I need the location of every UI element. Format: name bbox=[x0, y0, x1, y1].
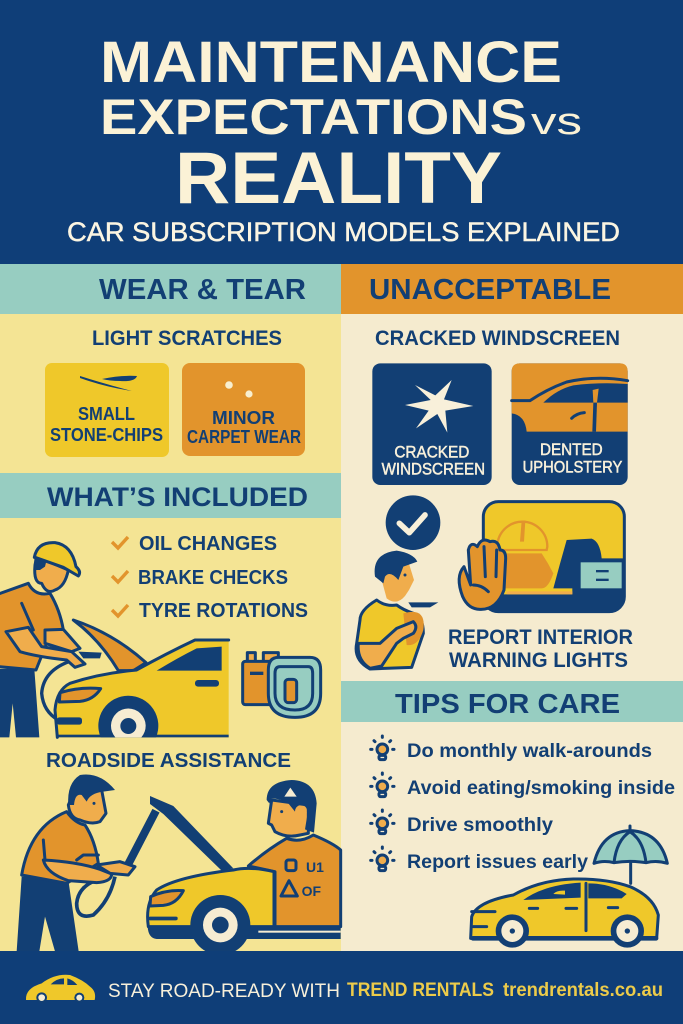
title: REALITY bbox=[175, 138, 502, 219]
heading: wear and tear bbox=[0, 264, 341, 314]
shirt badge: OF bbox=[302, 883, 322, 899]
hose tool bbox=[78, 652, 102, 658]
footer text: TREND RENTALS bbox=[347, 979, 494, 1001]
card: dented upholstery bbox=[512, 363, 628, 485]
shirt badge bbox=[281, 859, 324, 899]
heading: unacceptable: UNACCEPTABLE bbox=[369, 274, 611, 306]
icon: crack star bbox=[405, 380, 473, 433]
card: small stone-chips: STONE-CHIPS bbox=[50, 425, 163, 445]
illustration: car under umbrella bbox=[471, 826, 667, 948]
subheading: roadside assistance: ROADSIDE ASSISTANCE bbox=[46, 749, 291, 772]
left man pants bbox=[17, 877, 79, 951]
footer text: trendrentals.co.au bbox=[503, 979, 663, 1001]
list: care tips: Do monthly walk-arounds bbox=[407, 740, 652, 762]
card: minor carpet wear: CARPET WEAR bbox=[187, 427, 301, 447]
car hood bbox=[73, 620, 146, 671]
umbrella bbox=[594, 826, 667, 883]
caption: report interior warning lights: WARNING LIGHTS bbox=[449, 649, 628, 672]
card: small stone-chips: SMALL bbox=[78, 404, 135, 424]
title: MAINTENANCE bbox=[100, 30, 562, 95]
heading: unacceptable bbox=[341, 264, 683, 314]
panel: header bbox=[0, 0, 683, 264]
left man arm bbox=[43, 860, 135, 883]
wheel bbox=[611, 914, 644, 948]
list: care tips: Avoid eating/smoking inside bbox=[407, 777, 675, 799]
icon: stop hand bbox=[459, 540, 506, 609]
subheading: cracked windscreen: CRACKED WINDSCREEN bbox=[375, 327, 620, 350]
icon: bulb bbox=[371, 773, 394, 797]
card: minor carpet wear bbox=[182, 363, 305, 456]
panel: right column background bbox=[341, 314, 683, 951]
left man head bbox=[68, 790, 106, 823]
icon: check badge bbox=[386, 495, 440, 550]
heading: wear and tear: WEAR & TEAR bbox=[99, 274, 306, 306]
footer text: STAY ROAD-READY WITH bbox=[108, 980, 340, 1002]
title bbox=[100, 30, 582, 219]
right man shirt bbox=[248, 835, 341, 927]
left man shirt bbox=[22, 812, 98, 883]
mechanic head bbox=[35, 557, 68, 591]
checklist: included services: BRAKE CHECKS bbox=[138, 566, 288, 589]
card: minor carpet wear: MINOR bbox=[212, 408, 275, 428]
dashboard panel bbox=[473, 502, 624, 612]
mechanic shirt bbox=[0, 583, 63, 670]
checklist: included services bbox=[112, 532, 308, 622]
person with phone bbox=[356, 551, 438, 669]
subheading: light scratches: LIGHT SCRATCHES bbox=[92, 327, 282, 350]
card: dented upholstery: UPHOLSTERY bbox=[523, 457, 622, 476]
car graphic bbox=[512, 363, 628, 432]
wheel bbox=[496, 914, 529, 948]
car wheel bbox=[98, 696, 158, 737]
icon: wear dots bbox=[225, 381, 253, 398]
illustration: report warning lights bbox=[356, 495, 624, 669]
icon: bulb bbox=[371, 810, 394, 834]
icon: footer car bbox=[26, 975, 95, 1003]
card: cracked windscreen: CRACKED bbox=[394, 442, 469, 461]
heading: tips for care bbox=[341, 681, 683, 722]
hose bbox=[42, 661, 72, 720]
icon: bulb bbox=[371, 847, 394, 871]
yellow car front bbox=[148, 868, 274, 927]
helmet bbox=[34, 543, 80, 576]
checklist: included services: TYRE ROTATIONS bbox=[139, 599, 308, 622]
list: care tips: Report issues early bbox=[407, 851, 588, 873]
mechanic pants bbox=[0, 669, 39, 737]
yellow car bbox=[55, 640, 229, 737]
footer text bbox=[108, 979, 663, 1002]
raised hood bbox=[150, 796, 233, 871]
list: care tips bbox=[371, 736, 675, 873]
car wheel bbox=[190, 895, 250, 955]
card: cracked windscreen bbox=[372, 363, 492, 485]
illustration: roadside assistance bbox=[17, 774, 341, 955]
title: vs bbox=[531, 101, 582, 143]
hose loop bbox=[77, 877, 115, 916]
mechanic far arm bbox=[45, 629, 80, 652]
checklist: included services: OIL CHANGES bbox=[139, 532, 277, 555]
card: small stone-chips bbox=[45, 363, 169, 457]
shirt badge: U1 bbox=[306, 859, 324, 875]
icon: battery bbox=[243, 653, 321, 717]
caption: report interior warning lights bbox=[448, 626, 633, 672]
card: cracked windscreen: WINDSCREEN bbox=[382, 459, 485, 478]
mechanic near arm bbox=[6, 627, 85, 667]
car body bbox=[471, 879, 658, 938]
list: care tips: Drive smoothly bbox=[407, 814, 553, 836]
caption: report interior warning lights: REPORT INTERIOR bbox=[448, 626, 633, 649]
heading: what's included bbox=[0, 473, 341, 518]
icon: bulb bbox=[371, 736, 394, 760]
title: EXPECTATIONS bbox=[100, 89, 527, 145]
lever rod bbox=[128, 811, 156, 864]
subtitle: CAR SUBSCRIPTION MODELS EXPLAINED bbox=[67, 217, 620, 247]
heading: tips for care: TIPS FOR CARE bbox=[395, 688, 620, 719]
card: dented upholstery: DENTED bbox=[540, 440, 603, 459]
right man head bbox=[268, 800, 308, 836]
icon: scratch marks bbox=[80, 376, 137, 391]
panel: left column background bbox=[0, 314, 341, 951]
panel: footer bbox=[0, 951, 683, 1024]
heading: what's included: WHAT’S INCLUDED bbox=[47, 482, 308, 512]
illustration: mechanic with car bbox=[0, 543, 321, 737]
